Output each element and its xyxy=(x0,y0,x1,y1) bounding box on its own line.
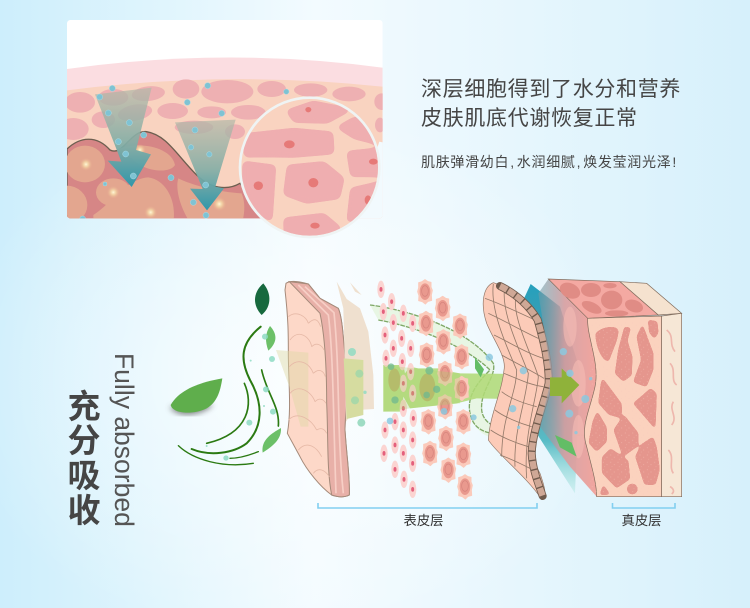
green absorption band xyxy=(383,365,522,412)
vertical title: 充分吸收: 吸 xyxy=(68,457,100,494)
magnifier circle xyxy=(240,98,382,242)
subheading text: 肌肤弹滑幼白,水润细腻,焕发莹润光泽! xyxy=(421,154,677,170)
band tint on cells xyxy=(388,368,435,401)
essence spots on cells xyxy=(388,363,440,404)
wind swirl lines xyxy=(178,327,278,465)
large cells xyxy=(418,280,472,499)
small cells xyxy=(377,281,417,498)
green arrow xyxy=(550,368,579,403)
label: dermis: 真皮层 xyxy=(622,513,661,528)
panel: skin cross-section illustration xyxy=(46,20,389,242)
skin layers xyxy=(67,20,383,218)
illustration: dissolving epidermis particles xyxy=(337,282,374,427)
bubbles xyxy=(387,348,592,434)
dermis block xyxy=(538,279,682,497)
grid membrane xyxy=(483,283,551,499)
bracket: epidermis xyxy=(318,503,537,508)
vertical title: 充分吸收: 充 xyxy=(68,388,100,425)
water droplets xyxy=(80,83,289,222)
beige fragment xyxy=(337,282,374,427)
arrows: absorption xyxy=(95,88,236,210)
vertical title: Fully absorbed: Fully absorbed xyxy=(109,353,139,527)
heading text: 深层细胞得到了水分和营养 xyxy=(421,78,681,101)
block front face xyxy=(584,316,662,497)
illustration: cells and absorption band xyxy=(370,279,682,499)
dermis xyxy=(67,132,273,222)
teal sheet xyxy=(523,284,580,493)
illustration: first epidermis layer xyxy=(276,281,349,497)
bracket: dermis xyxy=(612,503,675,508)
vertical title: 充分吸收 xyxy=(68,388,100,529)
label: epidermis: 表皮层 xyxy=(404,513,443,528)
icon: small leaves xyxy=(262,326,281,453)
swoosh ribbon xyxy=(370,305,603,437)
leaves in tissue xyxy=(475,357,577,457)
icon: large leaf xyxy=(169,378,222,415)
skin strip xyxy=(276,281,349,497)
essence droplets xyxy=(206,334,276,461)
block top face xyxy=(548,279,658,318)
vertical title: 充分吸收: 分 xyxy=(68,422,100,459)
icon: dark leaf xyxy=(255,283,269,315)
heading text: 皮肤肌底代谢恢复正常 xyxy=(421,107,638,130)
heading text xyxy=(421,78,681,130)
leaves and wind swirl xyxy=(169,283,281,465)
cell brick edge xyxy=(500,286,549,496)
block side face xyxy=(538,279,597,497)
band overlay on cells xyxy=(383,365,460,412)
vertical title: 充分吸收: 收 xyxy=(68,492,100,529)
